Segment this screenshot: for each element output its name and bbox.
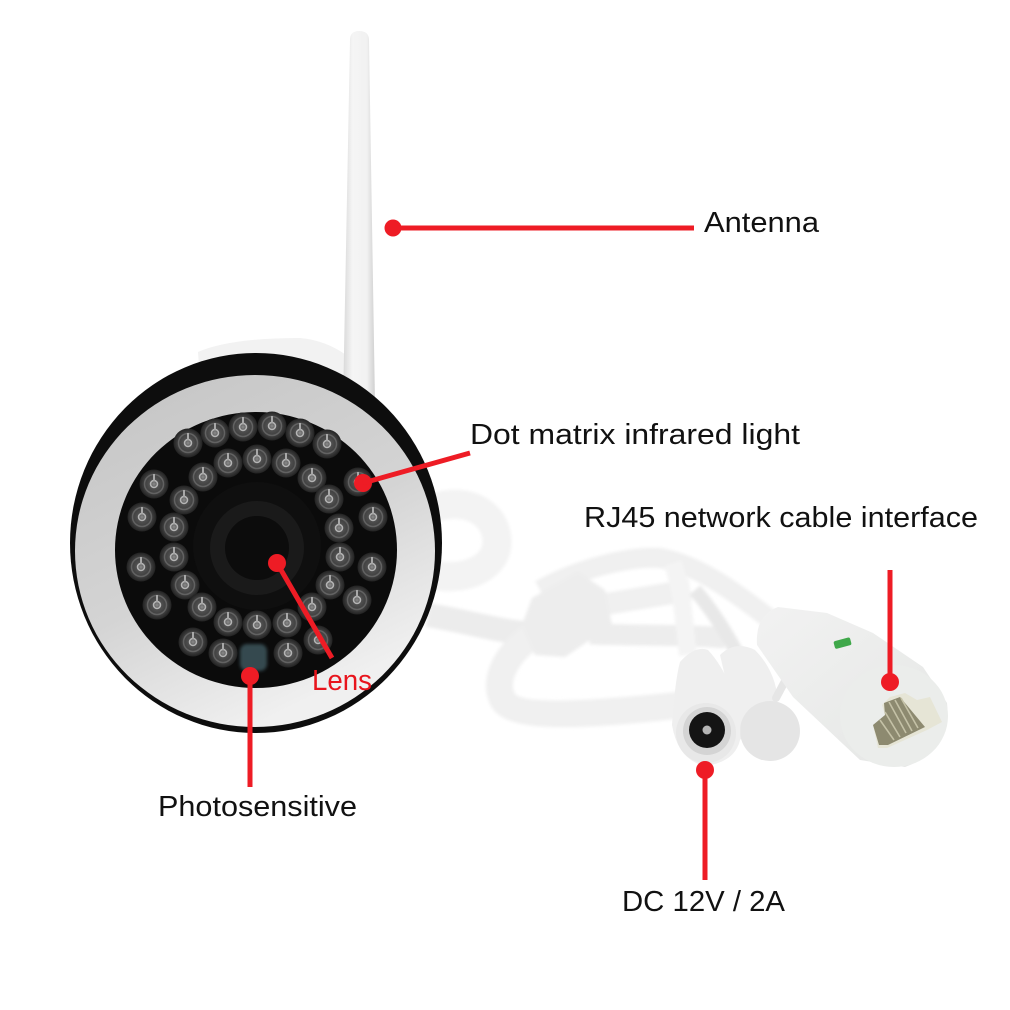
RJ45 connector	[757, 607, 948, 767]
black inner plate	[115, 412, 397, 688]
callout: dot matrix infrared light	[354, 419, 800, 492]
callout: lens: Lens	[312, 665, 372, 697]
camera housing behind face	[198, 338, 375, 400]
lens	[193, 482, 321, 610]
callout: dot matrix infrared light: Dot matrix infrared light	[470, 419, 800, 451]
black outer rim	[70, 353, 442, 733]
callout: DC 12V / 2A	[622, 761, 786, 918]
green status light	[833, 637, 852, 649]
callout: RJ45 network cable interface	[584, 502, 978, 691]
junction sleeve	[522, 572, 612, 657]
antenna	[343, 31, 375, 405]
photosensor window	[240, 644, 267, 671]
infrared LEDs	[126, 412, 388, 668]
callout: lens	[268, 554, 372, 697]
RJ45 port	[873, 693, 942, 748]
light grey ring	[75, 375, 435, 727]
second plug with cap	[720, 646, 800, 761]
camera face	[70, 353, 442, 733]
callout: photosensitive: Photosensitive	[158, 791, 357, 823]
power and network cables	[428, 504, 790, 714]
callout: antenna	[384, 207, 820, 239]
coiled cable behind camera	[432, 504, 497, 577]
plug cap	[740, 701, 800, 761]
callout: DC 12V / 2A: DC 12V / 2A	[622, 886, 786, 918]
upper cable to RJ45	[540, 558, 790, 655]
callout: photosensitive	[158, 667, 357, 823]
DC power jack	[672, 649, 740, 766]
main cable to junction	[428, 615, 535, 634]
callout: antenna: Antenna	[704, 207, 820, 239]
lower cable loop	[499, 636, 690, 714]
callout: RJ45 network cable interface: RJ45 network cable interface	[584, 502, 978, 534]
